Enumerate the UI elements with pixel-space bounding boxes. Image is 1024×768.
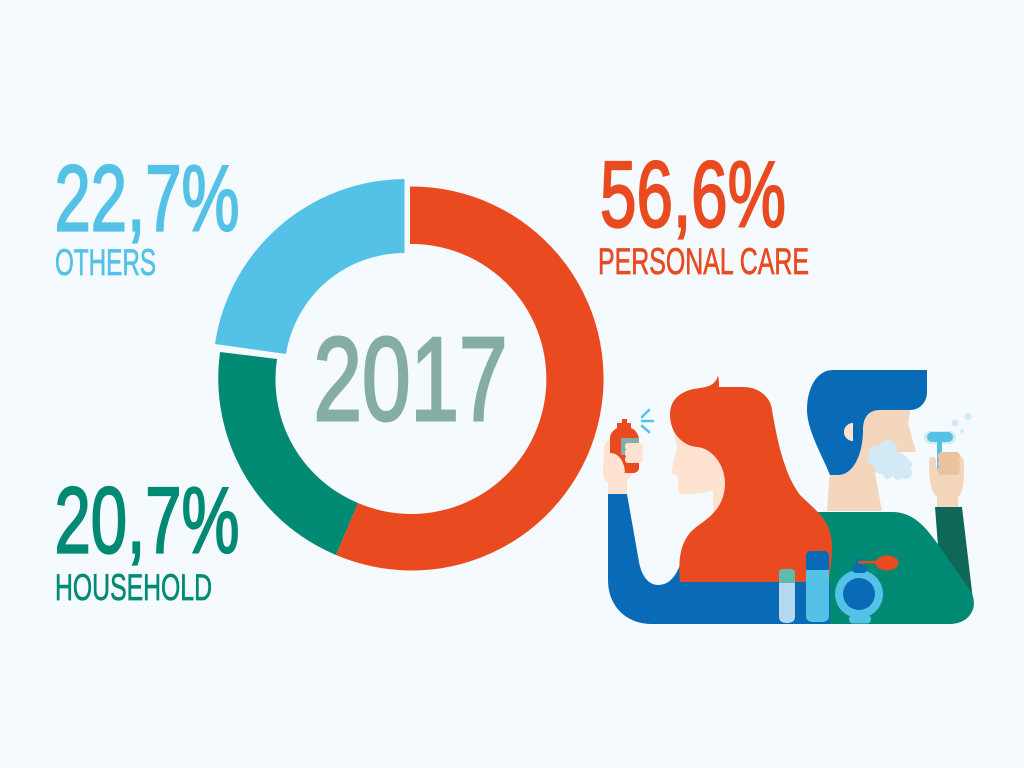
segment: others 22,7% bbox=[215, 179, 404, 354]
man's neck and face bbox=[827, 405, 916, 511]
shaving foam bbox=[867, 440, 912, 480]
label: personal care bbox=[598, 142, 809, 282]
name: household: HOUSEHOLD bbox=[55, 567, 212, 608]
man bbox=[807, 370, 974, 624]
bubbles bbox=[952, 413, 972, 433]
man's hand bbox=[929, 455, 964, 507]
man's ear bbox=[844, 423, 853, 441]
segment: personal care 56,6% bbox=[336, 186, 604, 570]
woman's face bbox=[671, 425, 735, 515]
man's green torso bbox=[812, 512, 974, 624]
value: 56,6%: 56,6% bbox=[600, 142, 786, 246]
label: household bbox=[54, 468, 239, 608]
tall bottle product bbox=[806, 551, 829, 622]
illustration: woman and man with personal care products bbox=[603, 370, 974, 624]
value: 22,7%: 22,7% bbox=[54, 146, 239, 250]
man's hair bbox=[807, 370, 927, 475]
spray lines bbox=[642, 410, 653, 432]
atomizer perfume bbox=[835, 556, 898, 624]
name: others: OTHERS bbox=[55, 242, 156, 283]
woman's blue arm and base bbox=[608, 494, 830, 624]
perfume bottle bbox=[604, 419, 643, 480]
man's dark sleeve bbox=[935, 507, 973, 600]
segment: household 20,7% bbox=[218, 352, 358, 555]
donut chart bbox=[215, 179, 604, 570]
razor bbox=[924, 431, 956, 469]
woman's hand holding bottle bbox=[603, 439, 633, 494]
woman's red hair bbox=[670, 375, 832, 582]
woman bbox=[603, 375, 832, 624]
man's fingers bbox=[938, 452, 960, 475]
tube product bbox=[779, 569, 795, 623]
center year label: 2017 bbox=[314, 313, 508, 446]
label: others bbox=[54, 146, 239, 283]
value: 20,7%: 20,7% bbox=[54, 468, 239, 572]
name: personal care: PERSONAL CARE bbox=[598, 241, 809, 282]
